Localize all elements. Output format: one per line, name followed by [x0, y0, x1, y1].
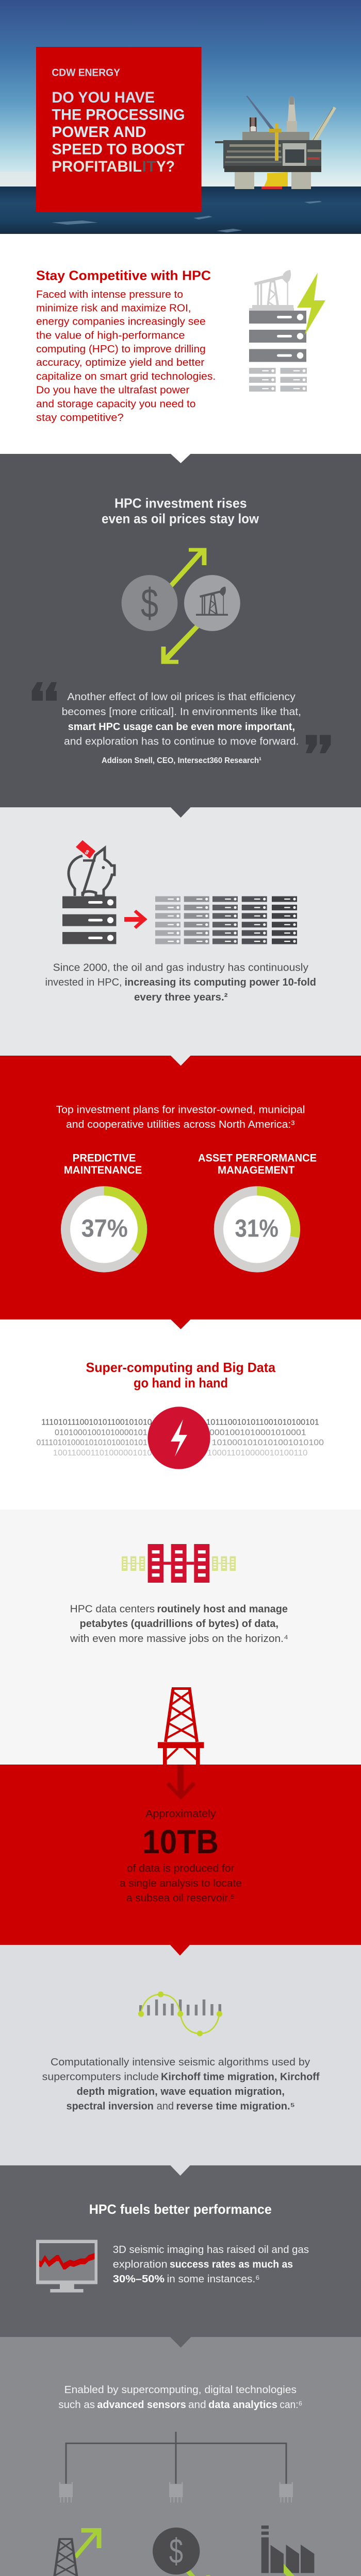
title box: [36, 47, 202, 212]
quote text: becomes [more critical]. In environments like that,: [62, 706, 301, 718]
arrow: growth: [124, 910, 147, 929]
icon: dollar circle: [122, 575, 177, 631]
intro text: [56, 1104, 305, 1130]
panel: HPC fuels better performance: [0, 2165, 361, 2337]
investment text: Since 2000, the oil and gas industry has continuously: [53, 962, 308, 974]
heading: Stay Competitive with HPC: [36, 268, 211, 283]
icon: red drilling derrick: [158, 1687, 204, 1765]
algorithms text: supercomputers include: [42, 2071, 159, 2082]
benefit: reduce capital costs: [146, 2528, 216, 2576]
seismic imaging text: [113, 2244, 309, 2285]
binary data stream: 1011100101011001010100101: [206, 1418, 319, 1427]
panel: hero with offshore platform: [0, 0, 361, 234]
intro text: and cooperative utilities across North America:³: [66, 1119, 295, 1130]
intro paragraph: the value of high-performance: [36, 330, 185, 341]
heading: go hand in hand: [134, 1375, 228, 1391]
quote text: Another effect of low oil prices is that efficiency: [67, 691, 296, 703]
binary data stream: 0001001010001010001: [209, 1428, 306, 1437]
quote text: smart HPC usage can be even more important,: [68, 721, 295, 733]
stat: asset performance management: ASSET PERFORMANCE: [198, 1152, 317, 1164]
label: approximately: Approximately: [145, 1808, 216, 1820]
stat: asset performance management: MANAGEMENT: [218, 1164, 295, 1176]
eyebrow: CDW Energy: CDW ENERGY: [52, 67, 121, 78]
investment text: every three years.²: [134, 992, 228, 1003]
algorithms text: [42, 2057, 320, 2112]
title text: DO YOU HAVE: [52, 89, 155, 106]
data center text: HPC data centers: [70, 1603, 155, 1615]
algorithms text: depth migration, wave equation migration,: [77, 2086, 285, 2097]
algorithms text: Computationally intensive seismic algorithms used by: [51, 2057, 310, 2068]
icon: piggy bank on servers: [62, 840, 116, 944]
panel: seismic algorithms: [0, 1944, 361, 2165]
quote attribution: Addison Snell, CEO, Intersect360 Research¹: [102, 756, 261, 765]
icon: oil pump circle: [184, 575, 240, 631]
icon: dollar circle: $: [141, 580, 158, 626]
heading: HPC fuels better performance: [89, 2201, 272, 2217]
binary data stream: 1010001010101001010100: [212, 1438, 324, 1447]
heading: [86, 1360, 276, 1391]
data center text: petabytes (quadrillions of bytes) of data,: [79, 1618, 278, 1630]
stat: predictive maintenance: [61, 1152, 147, 1273]
seismic imaging text: 3D seismic imaging has raised oil and gas: [113, 2244, 309, 2256]
icon: monitor with seismic chart: [36, 2240, 97, 2293]
title text: POWER AND: [52, 124, 146, 141]
panel: digital technologies benefits: [0, 2337, 361, 2576]
algorithms text: and: [157, 2101, 174, 2112]
investment text: [45, 962, 316, 1003]
title text: [52, 89, 185, 175]
icon: oil platform: [215, 96, 336, 189]
intro paragraph: Faced with intense pressure to: [36, 289, 183, 300]
stat description: a subsea oil reservoir.⁵: [126, 1892, 235, 1904]
heading: HPC investment rises: [114, 496, 247, 511]
benefit: lower operating costs: [251, 2526, 325, 2576]
stat: 10TB: 10TB: [142, 1823, 219, 1860]
intro paragraph: capitalize on smart grid technologies.: [36, 371, 216, 382]
heading: Super-computing and Big Data: [86, 1360, 276, 1375]
investment text: increasing its computing power 10-fold: [125, 977, 316, 988]
stat: asset performance management: [198, 1152, 317, 1273]
intro text: Top investment plans for investor-owned, municipal: [56, 1104, 305, 1115]
intro text: such as: [58, 2399, 95, 2411]
stat description: [120, 1863, 242, 1904]
seismic imaging text: exploration: [113, 2259, 168, 2270]
title text: IT: [142, 158, 156, 175]
stat description: a single analysis to locate: [120, 1878, 242, 1889]
intro paragraph: accuracy, optimize yield and better: [36, 357, 205, 368]
intro paragraph: Do you have the ultrafast power: [36, 385, 190, 396]
stat description: of data is produced for: [127, 1863, 235, 1874]
intro text: Enabled by supercomputing, digital technologies: [64, 2384, 297, 2396]
intro text: [58, 2384, 302, 2411]
arrow: up: [169, 548, 206, 588]
panel: 10TB of data: [0, 1765, 361, 1945]
intro text: advanced sensors: [97, 2399, 186, 2411]
title text: SPEED TO BOOST: [52, 141, 185, 158]
icon: data center towers: [122, 1544, 236, 1583]
quote text: [62, 691, 301, 747]
connector cables: [66, 2432, 286, 2484]
intro text: data analytics: [208, 2399, 277, 2411]
quotation mark: open: [32, 682, 57, 701]
binary data stream: 1110101110010101100101010: [41, 1418, 152, 1427]
title text: PROFITABIL: [52, 158, 142, 175]
donut chart: 37%: [61, 1186, 147, 1273]
panel: HPC investment rises: [0, 453, 361, 807]
intro paragraph: stay competitive?: [36, 412, 124, 423]
title text: THE PROCESSING: [52, 106, 185, 124]
intro paragraph: and storage capacity you need to: [36, 398, 196, 410]
seismic imaging text: success rates as much as: [170, 2259, 293, 2270]
algorithms text: reverse time migration.⁵: [176, 2101, 295, 2112]
panel: top investment plans: [0, 1055, 361, 1319]
seismic imaging text: 30%–50%: [113, 2274, 165, 2285]
data center text: routinely host and manage: [157, 1603, 288, 1615]
icon: server grid: [155, 896, 297, 944]
seismic imaging text: in some instances.⁶: [167, 2274, 260, 2285]
binary data stream: [36, 1418, 324, 1458]
benefit: increase production: [38, 2528, 112, 2576]
panel: continuous investment: [0, 807, 361, 1056]
data center text: [70, 1603, 288, 1645]
icon: three plugs: [59, 2482, 293, 2503]
intro paragraph: [36, 289, 216, 423]
stat: predictive maintenance: MAINTENANCE: [64, 1164, 142, 1176]
icon: pumpjack on servers with lightning bolt: [249, 270, 325, 392]
binary data stream: 100110001101000001010: [53, 1449, 152, 1458]
intro paragraph: energy companies increasingly see: [36, 316, 206, 328]
quotation mark: close: [306, 735, 331, 753]
panel: data centers: [0, 1510, 361, 1765]
panel: super-computing and big data: [36, 1319, 324, 1469]
icon: seismic wave over bars: [138, 1991, 222, 2037]
binary data stream: 01010001001010000101: [55, 1428, 147, 1437]
donut chart: 37%: 37%: [81, 1215, 128, 1243]
intro paragraph: computing (HPC) to improve drilling: [36, 344, 206, 355]
algorithms text: Kirchoff time migration, Kirchoff: [161, 2071, 320, 2082]
heading: [102, 496, 259, 526]
quote text: and exploration has to continue to move forward.: [64, 736, 299, 747]
algorithms text: spectral inversion: [67, 2101, 154, 2112]
investment text: invested in HPC,: [45, 977, 122, 988]
stat: predictive maintenance: PREDICTIVE: [73, 1152, 136, 1164]
icon: lightning bolt circle: [147, 1406, 210, 1469]
binary data stream: 100011010000010100110: [207, 1449, 307, 1458]
title text: Y?: [156, 158, 175, 175]
icon: piggy bank on servers: $: [83, 849, 91, 856]
benefit: reduce capital costs: $: [169, 2532, 183, 2571]
binary data stream: 0111010100010101010010101: [36, 1438, 147, 1447]
panel: stay competitive intro: [36, 268, 325, 423]
donut chart: 31%: [214, 1186, 300, 1273]
intro text: and: [188, 2399, 206, 2411]
data center text: with even more massive jobs on the horizon.⁴: [70, 1633, 288, 1645]
heading: even as oil prices stay low: [102, 511, 259, 526]
intro paragraph: minimize risk and maximize ROI,: [36, 302, 191, 314]
intro text: can:⁶: [280, 2399, 302, 2411]
donut chart: 31%: 31%: [235, 1215, 278, 1243]
arrow: drilling down: [166, 1765, 196, 1800]
arrow: down: [161, 624, 199, 664]
